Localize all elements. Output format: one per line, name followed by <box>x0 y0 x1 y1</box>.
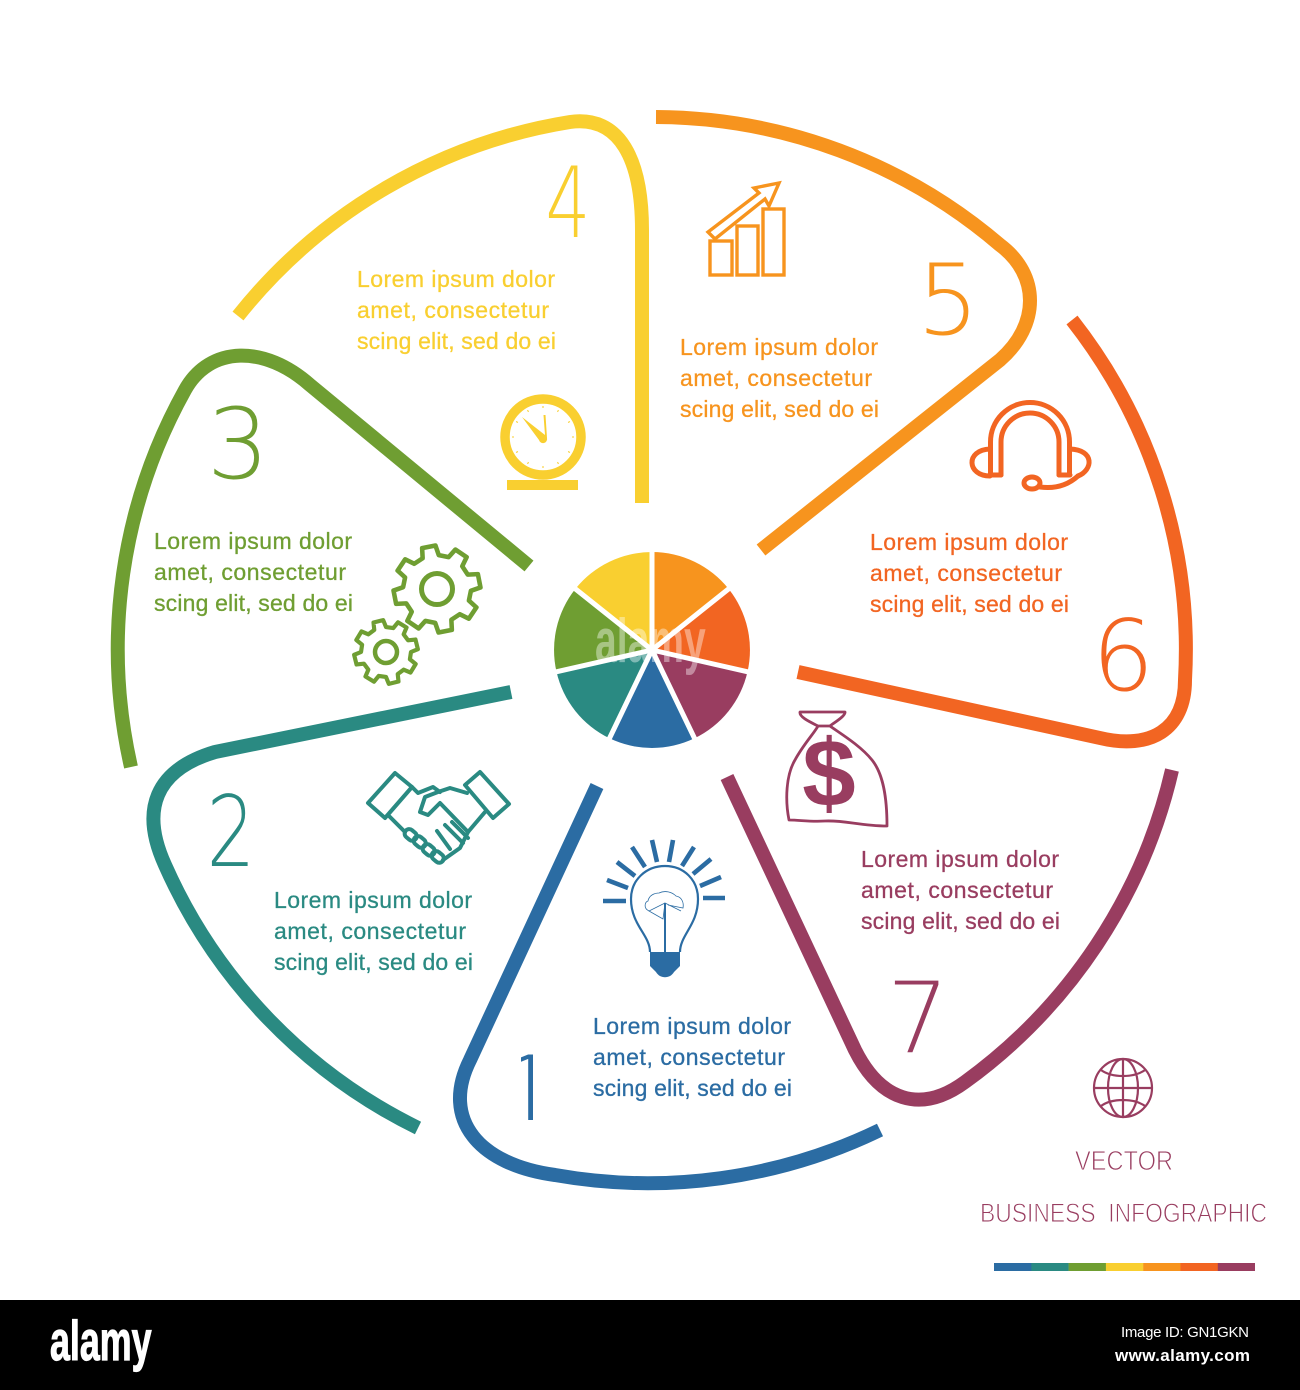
text block 5 <box>680 334 879 422</box>
number 6: 6 <box>1092 600 1154 714</box>
text block 6: scing elit, sed do ei <box>870 591 1069 617</box>
text block 4: Lorem ipsum dolor <box>357 266 555 292</box>
text block 5: amet, consectetur <box>680 365 872 391</box>
text block 2: Lorem ipsum dolor <box>274 887 472 913</box>
text block 4: scing elit, sed do ei <box>357 328 556 354</box>
icon: clock <box>505 399 581 490</box>
text block 6: amet, consectetur <box>870 560 1062 586</box>
segment 4 outline: yellow <box>238 121 642 503</box>
label: VECTOR: VECTOR <box>1075 1145 1173 1176</box>
number 2: 2 <box>207 775 255 889</box>
text block 2: scing elit, sed do ei <box>274 949 473 975</box>
icon: growth bar chart with arrow <box>708 183 784 275</box>
icon: gears <box>348 539 487 690</box>
footer logo: alamy <box>50 1309 152 1372</box>
text block 6: Lorem ipsum dolor <box>870 529 1068 555</box>
icon: light bulb <box>603 840 725 977</box>
text block 7: Lorem ipsum dolor <box>861 846 1059 872</box>
number 4: 4 <box>546 147 590 261</box>
text block 5: Lorem ipsum dolor <box>680 334 878 360</box>
text block 7: amet, consectetur <box>861 877 1053 903</box>
text block 1: Lorem ipsum dolor <box>593 1013 791 1039</box>
website: www.alamy.com <box>1114 1346 1250 1365</box>
number 5: 5 <box>917 244 979 358</box>
text block 3: amet, consectetur <box>154 559 346 585</box>
text block 4: amet, consectetur <box>357 297 549 323</box>
text block 4 <box>357 266 556 354</box>
segment 2 outline: teal <box>153 692 511 1128</box>
text block 2: amet, consectetur <box>274 918 466 944</box>
text block 3 <box>154 528 353 616</box>
icon: headset <box>972 402 1089 489</box>
text block 3: scing elit, sed do ei <box>154 590 353 616</box>
text block 1: scing elit, sed do ei <box>593 1075 792 1101</box>
icon: money bag: $ <box>802 720 856 827</box>
number 7: 7 <box>887 962 949 1076</box>
segment 3 outline: green <box>118 356 529 767</box>
icon: money bag <box>787 712 887 827</box>
text block 2 <box>274 887 473 975</box>
text block 3: Lorem ipsum dolor <box>154 528 352 554</box>
number 3: 3 <box>207 388 269 502</box>
segment 5 outline: orange <box>656 117 1030 550</box>
footer bar <box>0 1300 1300 1390</box>
number 1: 1 <box>498 1036 560 1150</box>
image id: Image ID: GN1GKN <box>1121 1324 1249 1341</box>
text block 6 <box>870 529 1069 617</box>
text block 1 <box>593 1013 792 1101</box>
text block 5: scing elit, sed do ei <box>680 396 879 422</box>
text block 7: scing elit, sed do ei <box>861 908 1060 934</box>
icon: globe <box>1094 1059 1152 1117</box>
segment 7 outline: purple <box>727 770 1172 1100</box>
text block 7 <box>861 846 1060 934</box>
center pie chart <box>553 548 751 748</box>
watermark over pie: alamy <box>595 606 706 675</box>
icon: handshake <box>368 772 509 865</box>
segment 1 outline: blue <box>460 786 880 1183</box>
text block 1: amet, consectetur <box>593 1044 785 1070</box>
segment 6 outline: red-orange <box>798 320 1186 741</box>
colour legend bar <box>994 1263 1255 1271</box>
